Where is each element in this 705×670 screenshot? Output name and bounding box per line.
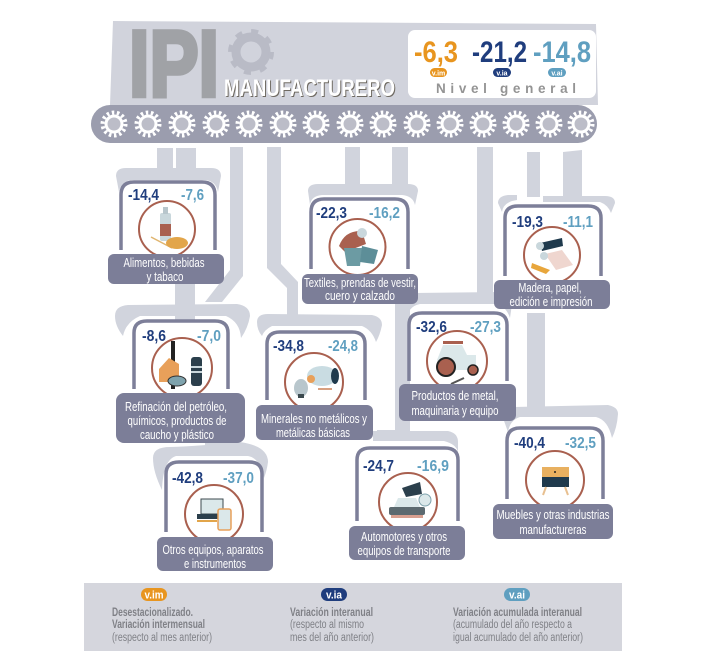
label: caucho y plástico [140, 427, 214, 442]
legend item: v.im [112, 588, 212, 644]
pipe cap: alimentos [116, 168, 221, 192]
label: manufactureras [520, 522, 587, 537]
pill: v.im: v.im [432, 70, 445, 78]
card frame [311, 199, 408, 269]
label [349, 526, 465, 560]
card frame [121, 182, 215, 250]
legend item: v.im: (respecto al mes anterior) [112, 632, 212, 644]
legend item: v.ai: Variación acumulada interanual [453, 607, 582, 619]
value: v.ia: -8,6 [142, 328, 166, 345]
conveyor belt [91, 105, 597, 143]
card: automotores [349, 448, 465, 560]
icon: textiles [330, 219, 386, 275]
card frame [505, 206, 601, 276]
card: textiles [302, 199, 418, 304]
pipe cap: minerales [257, 314, 382, 342]
value: v.ai: -37,0 [223, 470, 254, 487]
card frame [166, 462, 262, 532]
value: v.ai: -27,3 [470, 319, 501, 336]
card frame [267, 332, 365, 400]
legend item: v.ia: Variación interanual [290, 607, 373, 619]
legend item: v.ia: mes del año anterior) [290, 632, 374, 644]
card: minerales [256, 332, 373, 440]
label: cuero y calzado [325, 288, 395, 303]
icon: mixer and ore [285, 353, 343, 411]
label [256, 405, 373, 440]
label: Textiles, prendas de vestir, [304, 275, 416, 290]
pill: v.ai: v.ai [551, 70, 563, 78]
icon: refinery [152, 338, 212, 398]
pipe cap: automotores [373, 431, 458, 452]
value: v.ai: -14,8 [533, 36, 591, 69]
icon: devices [185, 485, 243, 543]
header panel [110, 11, 598, 116]
card: productos [399, 313, 516, 421]
value: v.ai: -16,2 [369, 205, 400, 222]
pill: v.ia: v.ia [496, 70, 508, 78]
card: alimentos [108, 182, 224, 284]
legend item: v.ia [290, 588, 374, 644]
label: metálicas básicas [276, 425, 350, 440]
card frame [357, 448, 458, 521]
icon: bottle and bread [139, 201, 195, 257]
value: v.ai: -7,0 [197, 328, 221, 345]
card: refinacion [116, 321, 245, 443]
label: Minerales no metálicos y [261, 411, 367, 426]
value: v.ia: -21,2 [472, 36, 527, 69]
label [493, 504, 613, 539]
card frame [134, 321, 228, 389]
label: nivel general: Nivel general [436, 81, 576, 96]
legend item: v.im: v.im [144, 590, 164, 602]
legend item: v.ai: (acumulado del año respecto a [453, 619, 572, 631]
subtitle: manufacturero: MANUFACTURERO [224, 75, 395, 102]
value: v.ai: -24,8 [328, 338, 358, 355]
icon: car and motorbike [379, 473, 437, 531]
label [399, 384, 516, 421]
label: e instrumentos [184, 556, 246, 571]
value: v.ai: -16,9 [417, 458, 449, 475]
icon: paper rolls and wood [524, 227, 580, 283]
card: muebles [493, 428, 613, 539]
label: edición e impresión [510, 294, 592, 309]
card: madera [494, 206, 610, 309]
legend item: v.ia: v.ia [326, 590, 343, 602]
value: v.ia: -24,7 [363, 458, 394, 475]
icon: nightstand [526, 451, 584, 509]
icon: title gear [230, 32, 272, 72]
value: v.ia: -22,3 [316, 205, 347, 222]
panel: nivel general [408, 30, 596, 98]
pipe cap: refinacion [115, 304, 250, 338]
label: maquinaria y equipo [412, 403, 498, 418]
card frame [507, 428, 603, 499]
connecting pipes [115, 147, 618, 490]
panel: legend [84, 583, 622, 651]
label [302, 274, 418, 304]
value: v.ai: -7,6 [181, 187, 204, 204]
card: otros equipos [157, 462, 273, 571]
pill: v.im [430, 68, 447, 78]
value: v.ia: -14,4 [128, 187, 159, 204]
label [157, 537, 273, 571]
label: Otros equipos, aparatos [162, 542, 264, 557]
label: Muebles y otras industrias [496, 507, 610, 522]
label: Refinación del petróleo, [125, 399, 227, 414]
pipe cap: textiles [308, 184, 418, 205]
value: v.ia: -42,8 [172, 470, 203, 487]
legend item: v.ia: (respecto al mismo [290, 619, 364, 631]
value: v.ai: -32,5 [565, 435, 596, 452]
label [116, 393, 245, 443]
pill: v.ia [493, 68, 511, 78]
label: Madera, papel, [518, 280, 582, 295]
legend item: v.ai: igual acumulado del año anterior) [453, 632, 583, 644]
value: v.ia: -34,8 [273, 338, 304, 355]
label: equipos de transporte [358, 543, 450, 558]
label: químicos, productos de [128, 413, 226, 428]
icon: tractor [427, 331, 487, 391]
label: Automotores y otros [361, 529, 447, 544]
value: v.ai: -11,1 [563, 214, 593, 231]
title: IPI: IPI [129, 11, 219, 116]
legend item: v.ai: v.ai [509, 590, 525, 602]
pipe cap: otros equipos [153, 442, 268, 490]
subtitle: manufacturero: MANUFACTURERO [225, 76, 396, 103]
pipe cap: muebles [503, 405, 618, 438]
label: Alimentos, bebidas [124, 255, 205, 270]
label: y tabaco [146, 269, 184, 284]
legend item: v.im: Variación intermensual [112, 619, 205, 631]
legend item: v.im: Desestacionalizado. [112, 607, 193, 619]
legend item: v.ai [453, 588, 583, 644]
pipe cap: productos [400, 292, 512, 322]
value: v.ia: -40,4 [514, 435, 545, 452]
label: Productos de metal, [412, 388, 498, 403]
label [494, 280, 610, 309]
value: v.ia: -32,6 [416, 319, 447, 336]
pipe cap: madera [498, 195, 517, 212]
value: v.ia: -19,3 [512, 214, 543, 231]
label [108, 254, 224, 284]
card frame [409, 313, 507, 381]
value: v.im: -6,3 [414, 36, 458, 69]
pill: v.ai [548, 68, 566, 78]
